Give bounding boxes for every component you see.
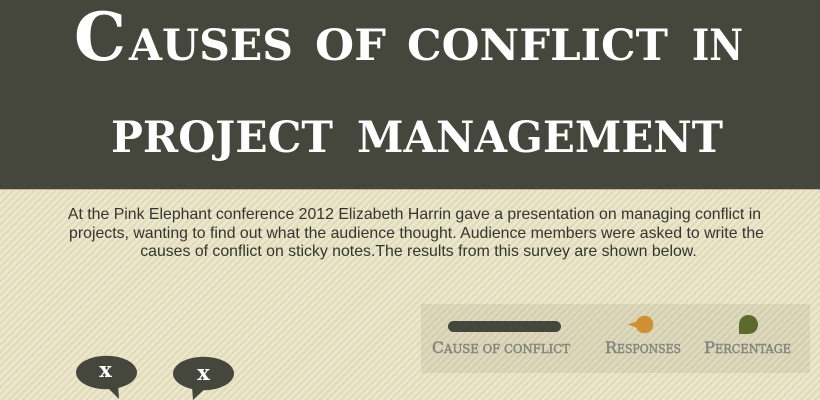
- legend labels: P: [704, 338, 715, 357]
- legend panel: [421, 304, 810, 373]
- legend: responses marker: [628, 316, 653, 333]
- title: C: [74, 0, 126, 76]
- intro text: projects, wanting to find out what the audience thought. Audience members were asked to write the: [69, 224, 764, 242]
- speech bubble 1: x: [99, 357, 112, 382]
- legend labels: C: [432, 338, 444, 357]
- title: [74, 0, 743, 163]
- legend labels: ERCENTAGE: [715, 342, 791, 356]
- intro text: causes of conflict on sticky notes.The results from this survey are shown below.: [140, 243, 697, 260]
- speech bubble 2: x: [197, 360, 210, 385]
- speech bubble 1: [76, 356, 137, 399]
- title: AUSES: [128, 21, 293, 71]
- intro text: [68, 206, 764, 260]
- legend labels: ESPONSES: [617, 342, 681, 356]
- title: CONFLICT: [407, 21, 668, 71]
- intro text: At the Pink Elephant conference 2012 Elizabeth Harrin gave a presentation on managing conflict in: [68, 206, 761, 223]
- title: IN: [692, 21, 743, 71]
- title: OF: [315, 21, 386, 71]
- legend: cause of conflict bar: [448, 321, 561, 332]
- speech bubble 2: [173, 357, 234, 400]
- legend labels: R: [605, 338, 618, 357]
- header band: [0, 0, 820, 190]
- title: PROJECT: [111, 113, 333, 163]
- legend labels: AUSE OF CONFLICT: [443, 342, 570, 356]
- legend: percentage marker: [739, 315, 758, 334]
- legend labels: [432, 338, 791, 357]
- title: MANAGEMENT: [357, 113, 723, 163]
